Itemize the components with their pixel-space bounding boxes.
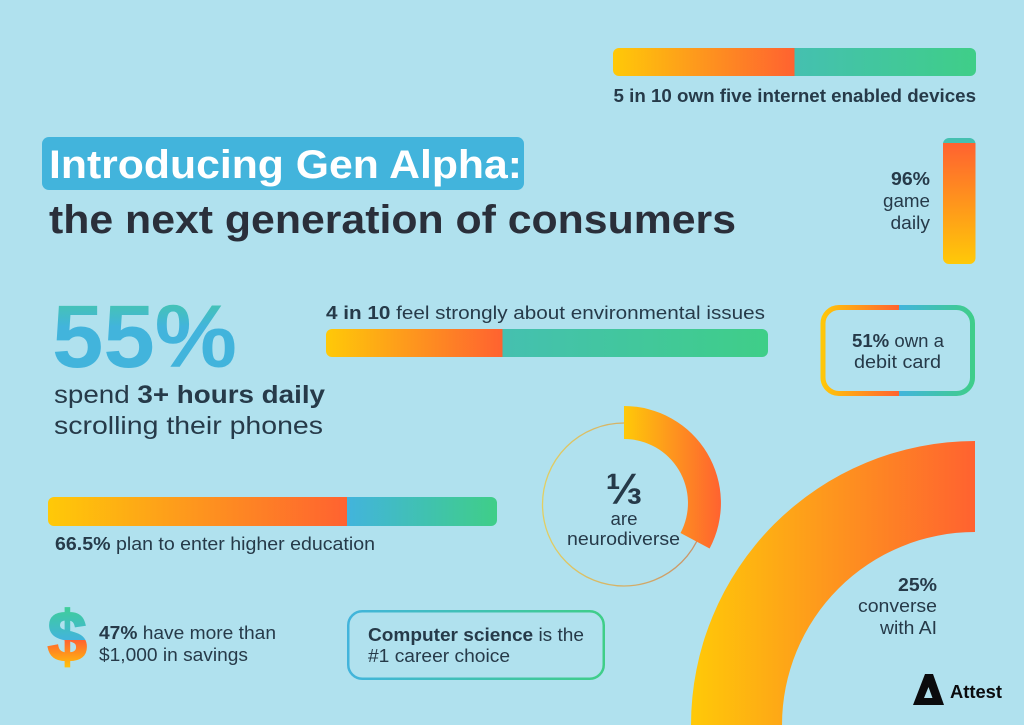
fraction: ⅓ — [606, 465, 642, 514]
stat: five internet enabled devices — [613, 48, 976, 106]
label: are neurodiverse — [567, 509, 680, 549]
vertical bar 96% — [943, 138, 976, 264]
callout: debit card — [823, 308, 972, 394]
thick arc — [624, 406, 721, 548]
icon: dollar sign: $ — [48, 598, 87, 677]
label: 5 in 10: 5 in 10 own five internet enabled devices — [614, 86, 976, 106]
label: 25% converse with AI: converse — [858, 596, 937, 616]
bar: 66.5% — [48, 497, 497, 526]
title highlight — [42, 137, 524, 190]
stat: converse with AI — [691, 441, 975, 725]
text: computer science — [368, 625, 584, 666]
label: 25% converse with AI — [858, 575, 937, 638]
text: 51% own a debit card — [852, 331, 945, 372]
bar: 5 in 10 — [613, 48, 976, 76]
callout: computer science — [348, 611, 604, 679]
label: 96% game daily — [883, 169, 930, 233]
stat: environmental issues — [326, 303, 768, 357]
label: 96% game daily: game — [883, 191, 930, 211]
big number 55%: 55% — [52, 286, 237, 386]
logo mark — [913, 674, 944, 705]
logo: Attest — [913, 674, 1002, 705]
bar: 4 in 10 — [326, 329, 768, 357]
text: spend 3+ hours daily: spend 3+ hours daily — [54, 381, 325, 409]
label: 25% converse with AI: with AI — [879, 618, 937, 638]
title line 1: Introducing Gen Alpha: — [49, 143, 522, 187]
quarter arc 25% — [691, 441, 975, 725]
label: 96% game daily: 96% — [891, 169, 930, 189]
gradient outline — [823, 308, 972, 394]
text: 47% savings — [99, 623, 276, 665]
label: are neurodiverse: neurodiverse — [567, 529, 680, 549]
stat: 55% scrolling — [52, 286, 325, 440]
donut: one third neurodiverse — [542, 406, 721, 586]
label: 96% game daily: daily — [890, 213, 930, 233]
text: 47% savings: 47% have more than — [99, 623, 276, 643]
stat: game daily — [883, 138, 976, 264]
logo wordmark: Attest — [950, 682, 1002, 702]
label: 66.5%: 66.5% plan to enter higher education — [55, 534, 375, 554]
title — [42, 137, 736, 242]
label: 4 in 10: 4 in 10 feel strongly about environmental issues — [326, 303, 765, 323]
stat: higher education — [48, 497, 497, 554]
text: 47% savings: $1,000 in savings — [99, 645, 248, 665]
text: 51% own a debit card: debit card — [854, 352, 941, 372]
label: 25% converse with AI: 25% — [898, 575, 937, 595]
label: are neurodiverse: are — [610, 509, 638, 529]
thin ring — [542, 423, 706, 586]
text: scrolling their phones: scrolling their phones — [54, 412, 323, 440]
outline — [348, 611, 604, 679]
title line 2: the next generation of consumers — [49, 198, 736, 242]
text: computer science: #1 career choice — [368, 646, 510, 666]
text: 51% own a debit card: 51% own a — [852, 331, 945, 351]
stat: savings — [48, 598, 276, 677]
text: computer science: Computer science is the — [368, 625, 584, 645]
